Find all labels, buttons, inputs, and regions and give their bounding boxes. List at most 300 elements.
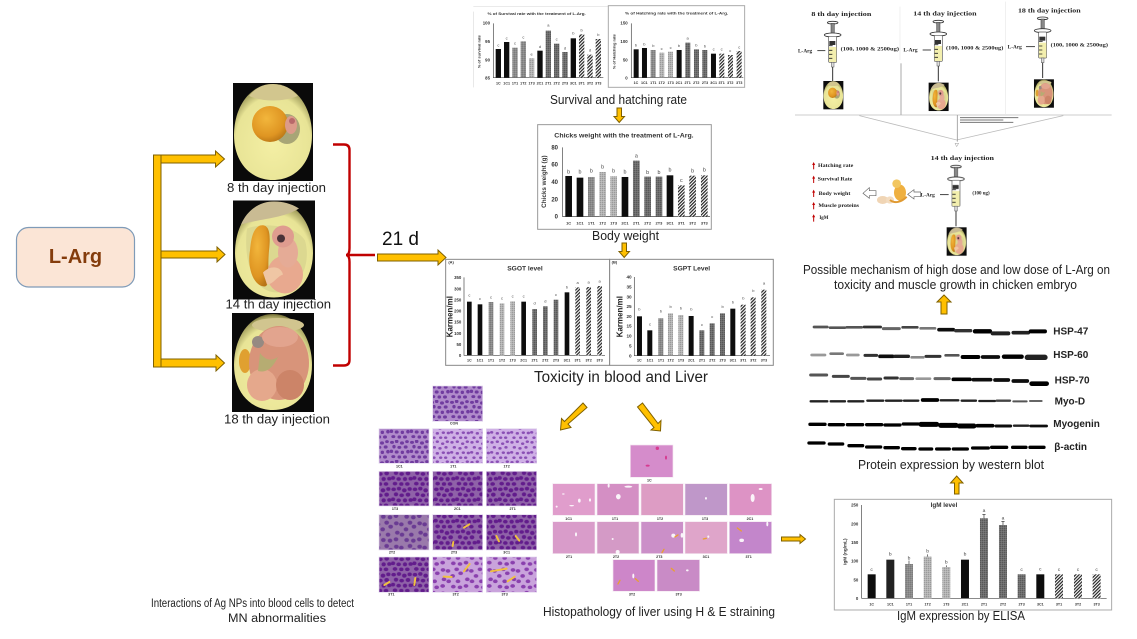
- chart: chicks weight: 2T2: [644, 221, 652, 226]
- chart: IgM level: 50: [853, 577, 859, 582]
- chart: hatching rate: 3C1: [710, 81, 717, 85]
- chart: SGPT level: 1C1: [647, 358, 653, 362]
- chart: chicks weight: b: [623, 169, 626, 175]
- chart: IgM level: 3T1: [1056, 603, 1062, 607]
- caption: blood cells: Interactions of Ag NPs into blood cells to detect: [151, 598, 355, 610]
- panel: liver histology: 3T1: [745, 555, 752, 559]
- chart: SGOT level: c: [501, 295, 503, 300]
- panel: blood smears: 1C1: [396, 464, 403, 468]
- caption: blood cells: MN abnormalities: [228, 613, 326, 625]
- panel: blood smears: 2T1: [509, 507, 516, 511]
- chart: hatching rate: 2C1: [676, 81, 682, 85]
- chart: survival rate: 2C1: [537, 82, 543, 86]
- panel: blood smears: 1T2: [503, 464, 510, 468]
- chart: IgM level: 250: [851, 503, 859, 508]
- chart: survival rate: 85: [485, 75, 491, 80]
- group: three injection schemes: [798, 7, 1108, 111]
- chart: chicks weight: Chicks weight (g): [541, 155, 548, 208]
- arrow: up to western blot: [950, 476, 963, 494]
- chart: chicks weight: b: [567, 169, 570, 175]
- chart: SGOT level: 1C1: [477, 358, 483, 362]
- chart: SGOT level: 150: [454, 320, 462, 325]
- group: 14th day low-dose scheme: Muscle proteins: [818, 204, 859, 209]
- chart: hatching rate: % of Hatching rate with the treatment of L-Arg.: [625, 11, 728, 16]
- arrow: to blood cells: [560, 403, 587, 430]
- chart: hatching rate: a: [687, 36, 690, 41]
- caption: body weight: Body weight: [592, 228, 659, 243]
- chart: SGPT level: b: [752, 288, 755, 293]
- chart: SGPT level: 35: [626, 284, 632, 289]
- chart: SGPT level: 3T2: [750, 358, 756, 362]
- chart: survival rate: 90: [485, 57, 491, 62]
- blot labels: Myogenin: [1053, 419, 1100, 430]
- caption: 14th day: 14 th day injection: [226, 296, 331, 312]
- chart: IgM level: 1T2: [924, 603, 931, 607]
- chart: hatching rate: 1C1: [641, 81, 648, 85]
- chart: survival rate: 3T1: [578, 82, 585, 86]
- caption: 18th day: 18 th day injection: [224, 412, 330, 426]
- chart: survival rate: b: [572, 31, 575, 36]
- image: 18th day egg: [232, 313, 314, 412]
- panel: blood smears: 2T2: [389, 550, 395, 554]
- chart: hatching rate: b: [704, 43, 707, 48]
- group: 14th day low-dose scheme: [812, 155, 994, 256]
- chart: SGPT level: 2C1: [688, 358, 695, 362]
- chart: SGPT level: 3T1: [740, 358, 746, 362]
- chart: SGPT level: 15: [626, 324, 632, 329]
- group: 14th day low-dose scheme: Body weight: [819, 192, 851, 197]
- chart: chicks weight: 2T1: [633, 221, 641, 226]
- chart: chicks weight: b: [601, 164, 604, 170]
- chart: IgM level: c: [1020, 567, 1023, 573]
- chart: hatching rate: 2T3: [702, 81, 708, 85]
- panel: liver histology: 2T3: [656, 555, 662, 559]
- caption: western blot: Protein expression by western blot: [858, 458, 1045, 472]
- chart: survival rate: 3T2: [587, 82, 593, 86]
- chart: chicks weight: b: [691, 168, 694, 174]
- chart: IgM level: b: [964, 551, 967, 557]
- panel: blood smears: 1T3: [392, 507, 398, 511]
- chart: hatching rate: c: [729, 48, 731, 53]
- chart: survival rate: 95: [485, 39, 491, 44]
- chart: chicks weight: 0: [555, 215, 559, 221]
- chart: SGOT level: 1T2: [499, 358, 505, 362]
- chart: chicks weight: b: [590, 169, 593, 175]
- chart: SGOT level: 2T2: [542, 358, 548, 362]
- chart: IgM level: b: [889, 551, 892, 557]
- chart: survival rate: a: [547, 23, 550, 28]
- chart: SGPT level: 1T2: [667, 358, 674, 362]
- chart: hatching rate: 1T1: [650, 81, 656, 85]
- chart: IgM level: 2C1: [962, 603, 968, 607]
- chart: IgM level: 1C: [869, 603, 874, 607]
- chart: SGPT level: 3T3: [761, 358, 767, 362]
- chart: SGOT level: d: [534, 301, 536, 306]
- chart: SGPT level: 25: [626, 304, 632, 309]
- box: L-Arg: [16, 228, 134, 287]
- caption: blood cells: [151, 598, 355, 625]
- chart: IgM level: 3T2: [1075, 603, 1081, 607]
- blot labels: HSP-60: [1053, 350, 1089, 361]
- chart: SGPT level: [610, 259, 773, 365]
- chart: SGOT level: c: [555, 292, 557, 297]
- chart: survival rate: c: [514, 41, 516, 46]
- chart: SGPT level: b: [670, 304, 673, 309]
- chart: SGPT level: 2T3: [719, 358, 726, 362]
- caption: IgM: IgM expression by ELISA: [897, 608, 1025, 623]
- chart: IgM level: IgM level: [931, 502, 958, 509]
- chart: chicks weight: b: [657, 170, 660, 176]
- chart: hatching rate: b: [652, 43, 655, 48]
- chart: IgM level: IgM (ng/mL): [843, 538, 848, 565]
- chart: survival rate: % of survival rate: [477, 34, 482, 68]
- chart: survival rate: d: [564, 45, 566, 50]
- chart: survival rate: 1T1: [512, 82, 518, 86]
- chart: IgM level: 0: [856, 596, 859, 601]
- chart: hatching rate: c: [713, 47, 715, 52]
- chart: SGOT level: 0: [459, 353, 462, 358]
- chart: survival rate: 1C1: [503, 82, 510, 86]
- chart: chicks weight: 80: [551, 145, 559, 151]
- chart: chicks weight: 3T2: [689, 221, 697, 226]
- panel: blood smears: [379, 386, 537, 596]
- chart: SGOT level: 3C1: [564, 358, 570, 362]
- chart: SGOT level: c: [512, 293, 514, 298]
- chart: SGOT level: a: [577, 280, 580, 285]
- chart: chicks weight: b: [703, 167, 706, 173]
- group: 14th day low-dose scheme: Hatching rate: [818, 164, 854, 169]
- red brace: [333, 144, 375, 366]
- label: 21 d: 21 d: [382, 229, 419, 250]
- chart: SGOT level: 200: [454, 309, 462, 314]
- panel: liver histology: 1T2: [657, 517, 663, 521]
- caption: possible mechanism: [803, 262, 1110, 292]
- chart: survival rate: 2T1: [545, 82, 551, 86]
- chart: chicks weight: 2C1: [621, 221, 629, 226]
- caption: 8th day: 8 th day injection: [227, 180, 326, 195]
- chart: IgM level: c: [1058, 567, 1061, 573]
- chart: SGOT level: a: [588, 279, 591, 284]
- chart: chicks weight: 1T2: [599, 221, 607, 226]
- chart: SGOT level: c: [468, 293, 470, 298]
- chart: hatching rate: b: [695, 42, 698, 47]
- panel: liver histology: 2C1: [747, 517, 753, 521]
- arrow: down to body weight: [614, 108, 624, 122]
- branching arrows from L-Arg: [154, 151, 225, 371]
- group: three injection schemes: (100, 1000 & 2500ug): [946, 45, 1004, 52]
- chart: chicks weight: 1T1: [588, 221, 596, 226]
- chart: SGOT level: 250: [454, 297, 462, 302]
- group: three injection schemes: 18 th day injection: [1018, 7, 1081, 14]
- group: 14th day low-dose scheme: IgM: [819, 216, 829, 221]
- chart: survival rate: c: [497, 43, 499, 48]
- blot labels: HSP-47: [1053, 327, 1089, 338]
- panel: blood smears: 3T3: [501, 592, 508, 596]
- chart: IgM level: 2T3: [1018, 603, 1025, 607]
- chart: chicks weight: 20: [551, 197, 559, 203]
- chart: IgM level: 2T2: [1000, 603, 1006, 607]
- chart: SGPT level: b: [742, 295, 745, 300]
- chart: IgM level: c: [1039, 566, 1042, 572]
- group: three injection schemes: L-Arg: [798, 48, 813, 54]
- chart: SGPT level: c: [649, 321, 651, 326]
- chart: hatching rate: 150: [620, 21, 628, 26]
- chart: survival rate: 2T2: [554, 82, 560, 86]
- chart: IgM level: 3C1: [1037, 603, 1044, 607]
- caption: possible mechanism: toxicity and muscle growth in chicken embryo: [834, 277, 1077, 292]
- chart: hatching rate: 3T3: [736, 81, 742, 85]
- panel: blood smears: 3T2: [453, 592, 459, 596]
- chart: chicks weight: 3T3: [701, 221, 709, 226]
- chart: IgM level: [834, 499, 1112, 610]
- chart: SGPT level: (B): [612, 260, 618, 265]
- chart: SGPT level: 10: [626, 334, 632, 339]
- chart: hatching rate: 3T1: [718, 81, 725, 85]
- chart: chicks weight: b: [579, 169, 582, 175]
- chart: SGOT level: a: [599, 279, 602, 284]
- chart: SGPT level: b: [680, 305, 683, 310]
- chart: survival rate: e: [531, 52, 534, 57]
- chart: survival rate: d: [589, 48, 591, 53]
- group: three injection schemes: 14 th day injection: [913, 10, 977, 17]
- caption: possible mechanism: Possible mechanism of high dose and low dose of L-Arg on: [803, 262, 1110, 277]
- arrow: down to toxicity: [619, 243, 630, 258]
- chart: SGPT level: c: [711, 314, 713, 319]
- chart: chicks weight: [538, 125, 711, 229]
- chart: SGPT level: 5: [629, 343, 632, 348]
- chart: IgM level: 1T3: [943, 603, 949, 607]
- panel: mechanism: [795, 2, 1112, 256]
- group: three injection schemes: L-Arg: [903, 48, 918, 54]
- chart: SGOT level: 50: [457, 342, 462, 347]
- chart: IgM level: c: [1095, 567, 1098, 573]
- chart: survival rate: 1T2: [520, 82, 526, 86]
- chart: IgM level: 1C1: [887, 603, 894, 607]
- chart: SGPT level: b: [638, 307, 641, 312]
- chart: SGPT level: b: [732, 299, 735, 304]
- chart: SGOT level: 1T1: [488, 358, 494, 362]
- chart: survival rate: c: [506, 36, 508, 41]
- chart: SGOT level: 100: [454, 331, 462, 336]
- chart: SGOT level: b: [566, 285, 569, 290]
- chart: SGOT level: d: [544, 299, 546, 304]
- chart: survival rate: [473, 7, 608, 87]
- panel: blood smears: 1T1: [450, 464, 456, 468]
- chart: hatching rate: b: [635, 42, 638, 47]
- chart: SGOT level: 2T3: [553, 358, 559, 362]
- chart: SGPT level: 30: [626, 294, 632, 299]
- group: 14th day low-dose scheme: 14 th day injection: [931, 155, 994, 162]
- chart: survival rate: 3T3: [595, 82, 601, 86]
- chart: survival rate: c: [522, 34, 524, 39]
- panel: blood smears: 3T1: [388, 592, 394, 596]
- chart: chicks weight: b: [612, 169, 615, 175]
- panel: liver histology: 3C1: [703, 555, 709, 559]
- chart: hatching rate: [608, 6, 745, 87]
- chart: SGOT level: (A): [448, 260, 455, 265]
- group: three injection schemes: L-Arg: [1008, 44, 1022, 50]
- chart: IgM level: 3T3: [1093, 603, 1100, 607]
- panel: liver histology: 1T3: [702, 517, 708, 521]
- chart: hatching rate: c: [670, 45, 672, 50]
- chart: hatching rate: 50: [623, 57, 628, 62]
- group: three injection schemes: (100, 1000 & 2500ug): [841, 45, 899, 52]
- chart: hatching rate: 100: [620, 39, 628, 44]
- chart: IgM level: a: [1002, 515, 1005, 521]
- chart: SGOT level: 3T3: [596, 358, 603, 362]
- chart: hatching rate: 1T2: [658, 81, 665, 85]
- chart: survival rate: b: [597, 32, 600, 37]
- chart: IgM level: 2T1: [981, 603, 987, 607]
- chart: IgM level: c: [870, 567, 873, 573]
- chart: hatching rate: c: [721, 47, 723, 52]
- box: L-Arg: L-Arg: [49, 246, 102, 268]
- chart: IgM level: b: [945, 559, 948, 565]
- panel: blood smears: 2C1: [454, 507, 461, 511]
- chart: SGOT level: c: [523, 293, 525, 298]
- chart: SGOT level: SGOT level: [507, 265, 543, 272]
- chart: SGPT level: 1T3: [678, 358, 684, 362]
- group: three injection schemes: 8 th day injection: [811, 11, 872, 18]
- panel: western blot: [809, 327, 1100, 453]
- chart: SGPT level: b: [690, 306, 693, 311]
- chart: SGPT level: b: [660, 309, 663, 314]
- blot labels: HSP-70: [1055, 375, 1090, 386]
- panel: blood smears: CON: [450, 422, 458, 426]
- group: three injection schemes: (100, 1000 & 2500ug): [1051, 41, 1108, 48]
- chart: SGPT level: c: [701, 322, 703, 327]
- chart: IgM level: b: [926, 548, 929, 554]
- panel: liver histology: 3T3: [675, 593, 682, 597]
- panel: blood smears: 3C1: [503, 550, 510, 554]
- image: 8th day egg: [233, 83, 313, 181]
- chart: chicks weight: 3C1: [666, 221, 674, 226]
- arrow: to IgM: [782, 534, 806, 544]
- chart: SGOT level: Karmen/ml: [446, 296, 455, 337]
- panel: liver histology: 2T2: [613, 555, 619, 559]
- panel: liver histology: 3T2: [629, 593, 635, 597]
- chart: chicks weight: 1C: [566, 221, 571, 226]
- chart: SGPT level: 2T1: [699, 358, 705, 362]
- group: 14th day low-dose scheme: (100 ug): [972, 192, 990, 197]
- chart: chicks weight: b: [668, 167, 671, 173]
- chart: survival rate: 2T3: [562, 82, 568, 86]
- chart: chicks weight: b: [646, 170, 649, 176]
- chart: survival rate: 1C: [496, 82, 501, 86]
- panel: liver histology: 2T1: [566, 555, 572, 559]
- chart: hatching rate: % of Hatching rate: [612, 33, 617, 69]
- panel: blood smears: 2T3: [451, 550, 457, 554]
- chart: SGOT level: 3T2: [585, 358, 592, 362]
- chart: chicks weight: 2T3: [656, 221, 663, 226]
- chart: SGOT level: [446, 259, 610, 365]
- chart: SGPT level: 0: [629, 353, 632, 358]
- chart: SGPT level: b: [722, 304, 725, 309]
- chart: survival rate: % of Survival rate with the treatment of L-Arg.: [487, 11, 586, 16]
- chart: IgM level: a: [983, 508, 986, 514]
- chart: IgM level: 1T1: [906, 603, 912, 607]
- panel: liver histology: 1T1: [612, 517, 618, 521]
- chart: chicks weight: 3T1: [678, 221, 686, 226]
- chart: chicks weight: c: [680, 178, 683, 184]
- chart: hatching rate: 0: [625, 75, 628, 80]
- chart: IgM level: 200: [851, 521, 859, 526]
- chart: hatching rate: 1C: [634, 81, 639, 85]
- chart: SGOT level: 2T1: [532, 358, 538, 362]
- chart: SGOT level: c: [479, 296, 481, 301]
- arrow: to liver: [638, 403, 661, 431]
- dividers and funnel: [795, 2, 1112, 147]
- chart: chicks weight: 1C1: [576, 221, 584, 226]
- chart: chicks weight: 1T3: [610, 221, 618, 226]
- caption: survival and hatching: Survival and hatching rate: [550, 92, 687, 107]
- chart: SGPT level: 20: [626, 314, 632, 319]
- chart: chicks weight: Chicks weight with the treatment of L-Arg.: [554, 133, 694, 140]
- caption: liver histology: Histopathology of liver using H & E straining: [543, 605, 775, 619]
- chart: SGOT level: 1T3: [510, 358, 516, 362]
- chart: SGPT level: 1C: [637, 358, 642, 362]
- image: 14th day egg: [233, 200, 315, 300]
- chart: SGPT level: 40: [626, 275, 632, 280]
- chart: SGPT level: SGPT Level: [673, 265, 710, 272]
- chart: hatching rate: 2T2: [693, 81, 699, 85]
- chart: IgM level: c: [1077, 567, 1080, 573]
- chart: SGOT level: 1C: [467, 358, 472, 362]
- chart: SGPT level: Karmen/ml: [616, 296, 625, 337]
- panel: liver histology: 1C1: [565, 517, 572, 521]
- chart: SGOT level: c: [490, 295, 492, 300]
- chart: SGOT level: 300: [454, 286, 462, 291]
- chart: SGPT level: 1T1: [658, 358, 664, 362]
- chart: SGOT level: 3T1: [574, 358, 581, 362]
- chart: chicks weight: 60: [551, 163, 559, 169]
- chart: hatching rate: 2T1: [684, 81, 691, 85]
- chart: survival rate: 1T3: [529, 82, 535, 86]
- arrow: to toxicity: [378, 250, 446, 265]
- group: 14th day low-dose scheme: L-Arg: [921, 192, 935, 198]
- chart: chicks weight: 40: [551, 180, 559, 186]
- chart: hatching rate: b: [643, 42, 646, 47]
- chart: IgM level: b: [908, 555, 911, 561]
- chart: hatching rate: 3T2: [727, 81, 733, 85]
- chart: SGOT level: 2C1: [520, 358, 527, 362]
- chart: SGPT level: a: [763, 281, 766, 286]
- chart: survival rate: c: [556, 37, 558, 42]
- chart: hatching rate: c: [738, 44, 740, 49]
- blot labels: [1053, 327, 1100, 453]
- chart: survival rate: 3C1: [570, 82, 577, 86]
- panel: liver histology: 1C: [647, 479, 652, 483]
- chart: SGOT level: 350: [454, 275, 462, 280]
- chart: survival rate: d: [539, 44, 541, 49]
- chart: hatching rate: b: [678, 43, 681, 48]
- blot labels: β-actin: [1054, 442, 1087, 453]
- chart: hatching rate: 1T3: [667, 81, 674, 85]
- chart: survival rate: b: [581, 28, 584, 33]
- caption: toxicity: Toxicity in blood and Liver: [534, 369, 708, 386]
- chart: SGPT level: 3C1: [730, 358, 736, 362]
- group: 14th day low-dose scheme: Survival Rate: [818, 178, 853, 183]
- chart: survival rate: 100: [483, 21, 491, 26]
- arrow: up to mechanism: [937, 295, 951, 314]
- chart: IgM level: 100: [851, 559, 859, 564]
- chart: SGPT level: 2T2: [709, 358, 715, 362]
- chart: IgM level: 150: [851, 540, 859, 545]
- blot labels: Myo-D: [1055, 397, 1085, 408]
- blot bands: [809, 327, 1047, 449]
- panel: liver histology: [553, 445, 772, 597]
- chart: chicks weight: a: [635, 153, 638, 159]
